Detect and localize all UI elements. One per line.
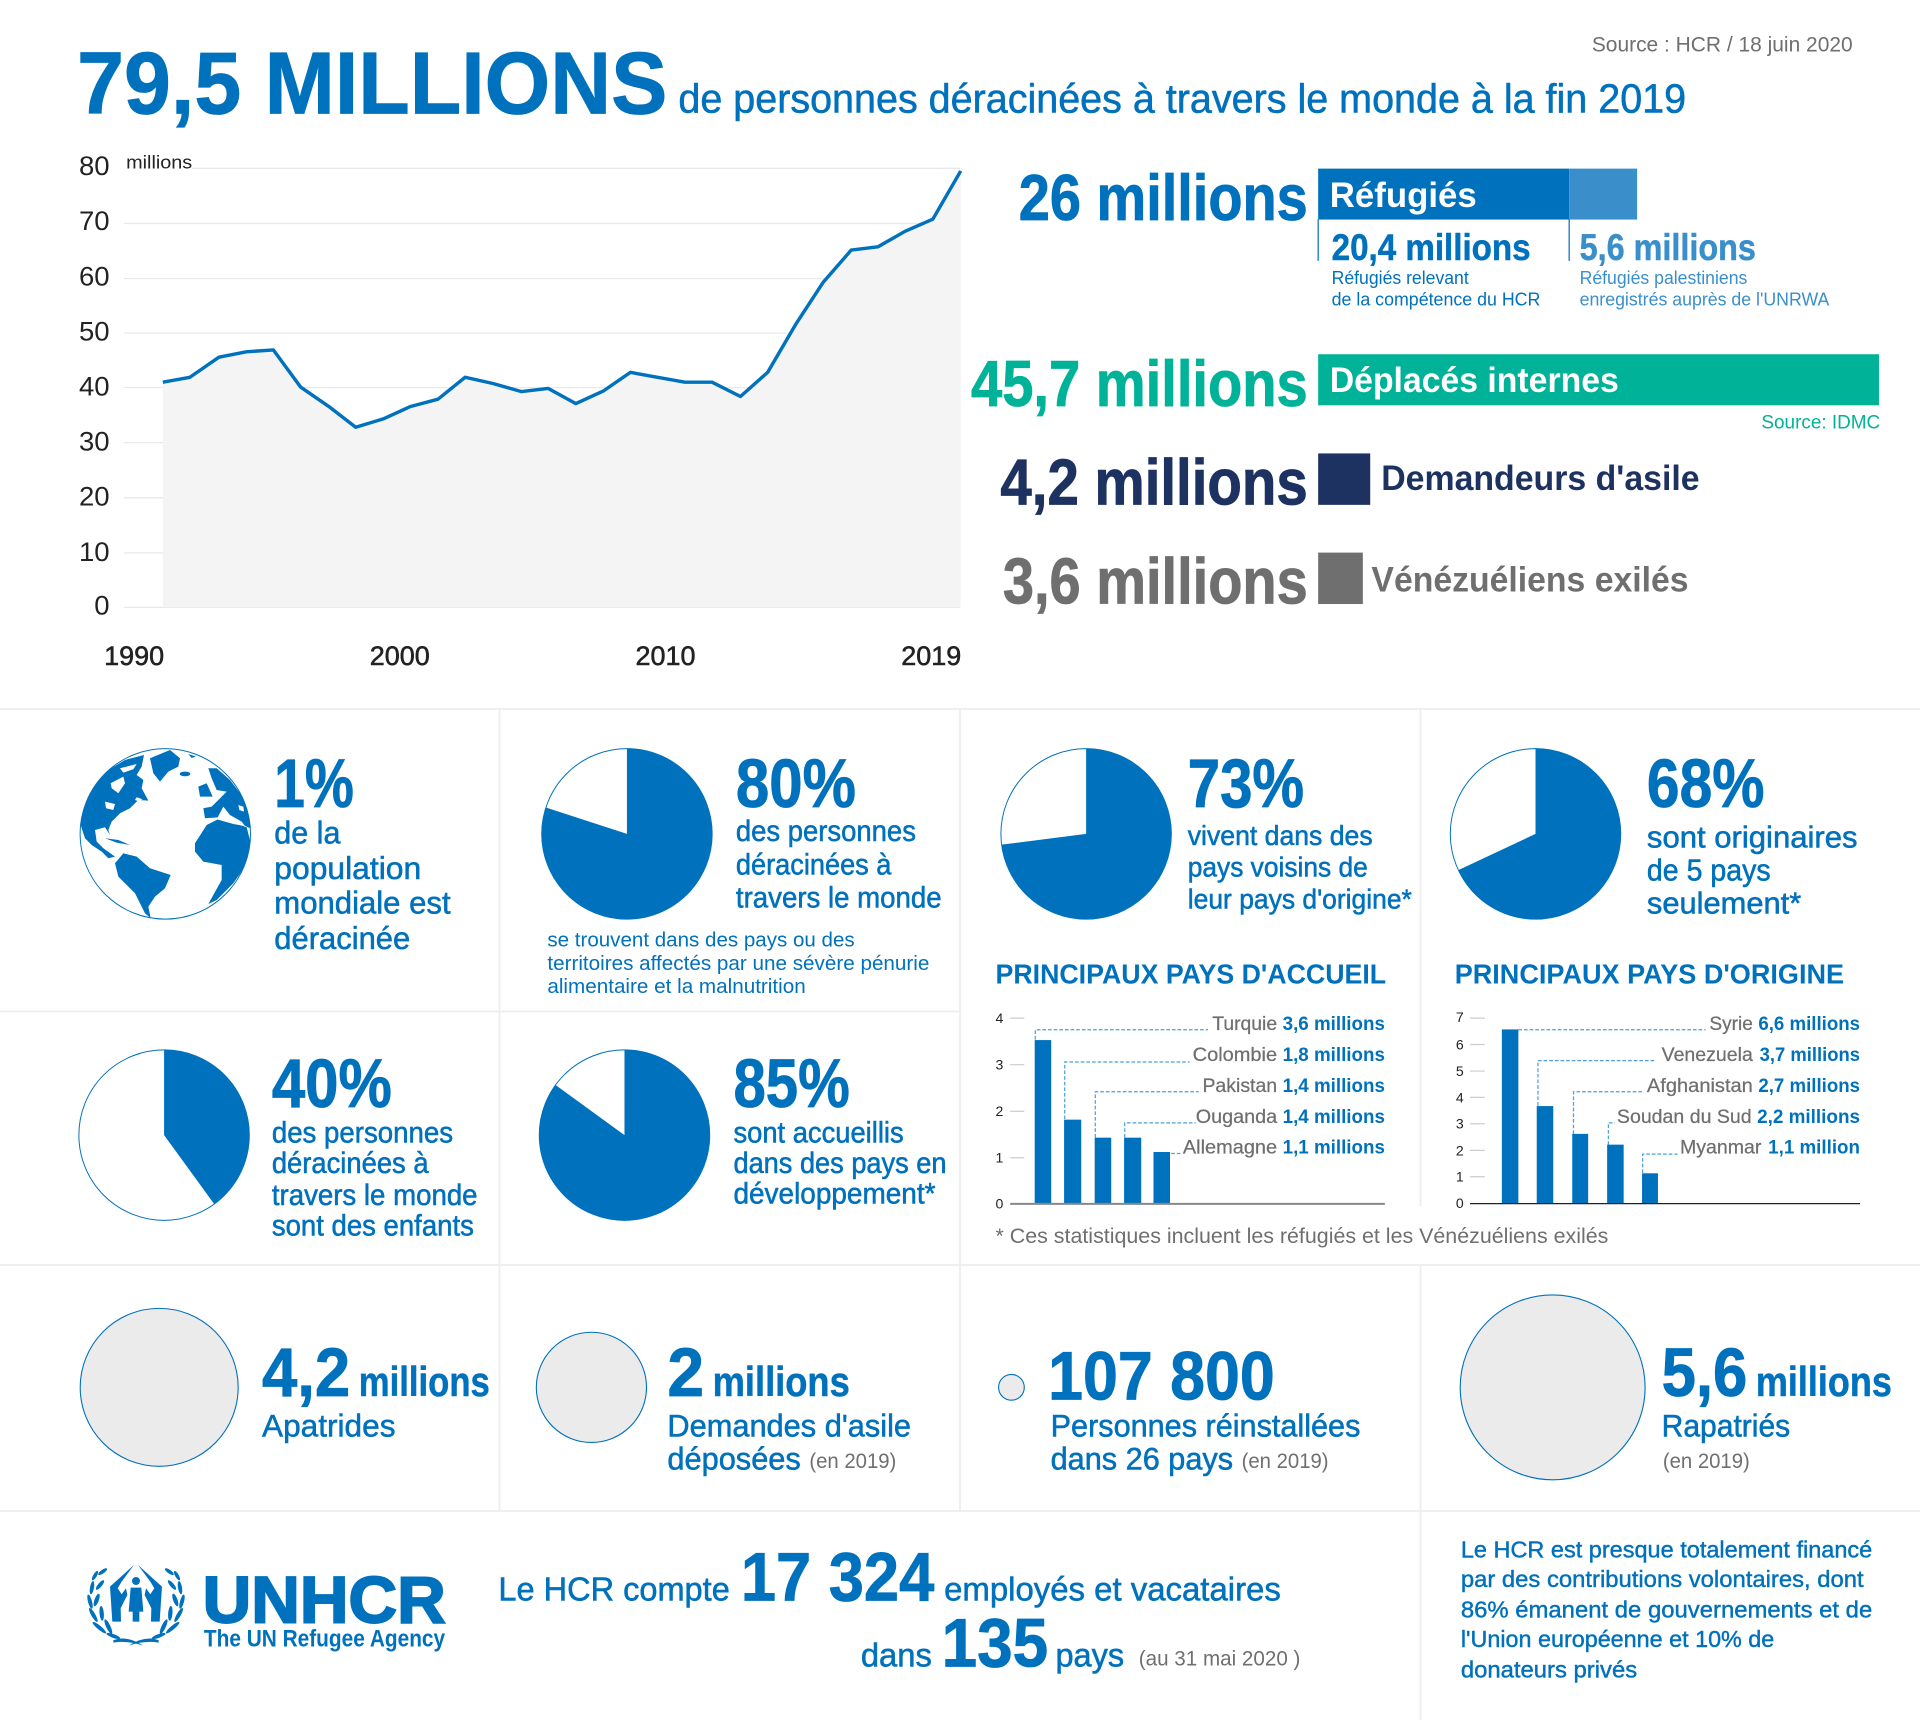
funding text: par des contributions volontaires, dont <box>1461 1566 1864 1592</box>
bar chart: principaux pays d'origine: 6 <box>1456 1036 1464 1052</box>
bar chart: principaux pays d'accueil: Ouganda <box>1196 1107 1278 1128</box>
panel: 80%: travers le monde <box>736 881 942 914</box>
staff text: dans <box>861 1638 932 1675</box>
bar chart: principaux pays d'origine: Soudan du Sud <box>1617 1107 1752 1128</box>
panel: déplacés internes <box>971 347 1880 434</box>
panel: 1% population <box>80 745 451 956</box>
panel: 80% <box>542 745 942 998</box>
panel: réfugiés: 5,6 millions <box>1580 227 1756 268</box>
panel: 40% <box>79 1045 478 1243</box>
panel: rapatriés: Rapatriés <box>1662 1407 1790 1443</box>
bar chart: principaux pays d'origine: 3 <box>1456 1116 1464 1132</box>
pie: 40% <box>79 1050 249 1220</box>
bar chart: principaux pays d'accueil: Turquie <box>1212 1014 1277 1035</box>
panel: 80%: se trouvent dans des pays ou des <box>547 930 855 952</box>
panel: 1% population: population <box>274 850 421 886</box>
line chart: displaced people 1990-2019: 40 <box>79 372 110 402</box>
panel: 68%: de 5 pays <box>1647 853 1771 887</box>
bar chart: principaux pays d'accueil: 0 <box>996 1196 1004 1212</box>
panel: rapatriés: millions <box>1756 1358 1892 1405</box>
bar chart: principaux pays d'accueil: 1,4 millions <box>1283 1076 1385 1097</box>
panel: 73% <box>1001 745 1412 919</box>
panel: apatrides: 4,2 <box>262 1334 350 1411</box>
panel: 1% population: mondiale est <box>274 884 451 920</box>
bar chart: principaux pays d'accueil: 1,1 millions <box>1283 1137 1385 1158</box>
panel: réfugiés: Réfugiés palestiniens <box>1580 267 1747 288</box>
panel: demandes d'asile <box>536 1332 911 1476</box>
staff text: (au 31 mai 2020 ) <box>1139 1647 1300 1670</box>
panel: demandeurs d'asile: 4,2 millions <box>1000 445 1308 518</box>
panel: rapatriés <box>1460 1295 1892 1480</box>
bar chart: principaux pays d'origine: 2 <box>1456 1142 1464 1158</box>
staff text: 17 324 <box>741 1538 934 1615</box>
bar chart: principaux pays d'accueil: 1,4 millions <box>1283 1107 1385 1128</box>
panel: 40%: déracinées à <box>272 1147 429 1180</box>
panel: 73%: 73% <box>1188 745 1304 822</box>
panel: 80%: déracinées à <box>736 848 892 881</box>
panel: 40%: sont des enfants <box>272 1210 474 1243</box>
bar chart: principaux pays d'accueil: 3,6 millions <box>1283 1014 1385 1035</box>
panel: 80%: territoires affectés par une sévère pénurie <box>547 953 929 975</box>
panel: personnes réinstallées: 107 800 <box>1048 1338 1275 1415</box>
staff text: 135 <box>942 1605 1048 1682</box>
panel: apatrides: millions <box>359 1358 490 1405</box>
panel: demandes d'asile: Demandes d'asile <box>667 1407 911 1443</box>
source note: Source : HCR / 18 juin 2020 <box>1592 33 1853 56</box>
panel: vénézuéliens exilés: Vénézuéliens exilés <box>1371 559 1689 599</box>
panel: 1% population: de la <box>274 815 341 851</box>
panel: réfugiés: 26 millions <box>1019 161 1308 234</box>
panel: personnes réinstallées: dans 26 pays <box>1051 1440 1233 1476</box>
logo: UNHCR: UNHCR <box>203 1563 446 1637</box>
line chart: displaced people 1990-2019: 20 <box>79 482 110 512</box>
bar chart: principaux pays d'origine: 6,6 millions <box>1758 1014 1860 1035</box>
panel: 68%: sont originaires <box>1647 820 1858 854</box>
line chart: displaced people 1990-2019: 60 <box>79 261 110 291</box>
panel: 85%: dans des pays en <box>733 1147 947 1180</box>
panel: réfugiés: Réfugiés <box>1330 175 1477 215</box>
panel: 1% population: 1% <box>274 745 354 822</box>
panel: rapatriés: 5,6 <box>1662 1334 1747 1411</box>
panel: personnes réinstallées: (en 2019) <box>1242 1450 1329 1473</box>
panel: réfugiés <box>1019 161 1830 309</box>
panel: apatrides <box>80 1308 490 1466</box>
panel: personnes réinstallées <box>999 1338 1360 1476</box>
panel: demandes d'asile: millions <box>713 1358 850 1405</box>
panel: rapatriés: (en 2019) <box>1663 1450 1750 1473</box>
panel: 40%: travers le monde <box>272 1179 478 1212</box>
footnote: * Ces statistiques incluent les réfugiés et les Vénézuéliens exilés <box>996 1224 1608 1248</box>
panel: vénézuéliens exilés: 3,6 millions <box>1003 545 1308 618</box>
line chart: displaced people 1990-2019: 80 <box>79 151 110 181</box>
staff text: pays <box>1056 1638 1124 1675</box>
panel: vénézuéliens exilés <box>1003 545 1689 618</box>
panel: déplacés internes: 45,7 millions <box>971 347 1308 420</box>
funding text <box>1461 1537 1872 1683</box>
line chart: displaced people 1990-2019: 10 <box>79 537 110 567</box>
pie: 85% <box>539 1050 710 1220</box>
bar chart: principaux pays d'accueil: PRINCIPAUX PAYS D'ACCUEIL <box>996 958 1386 989</box>
bar chart: principaux pays d'origine: 1 <box>1456 1169 1464 1185</box>
title: 79,5 MILLIONS <box>77 33 667 132</box>
bar chart: principaux pays d'origine: PRINCIPAUX PAYS D'ORIGINE <box>1455 958 1844 989</box>
funding text: Le HCR est presque totalement financé <box>1461 1537 1872 1563</box>
panel: demandeurs d'asile <box>1000 445 1700 518</box>
panel: 68%: 68% <box>1647 745 1764 822</box>
bar chart: principaux pays d'origine: Syrie <box>1709 1014 1753 1035</box>
panel: déplacés internes: Source: IDMC <box>1761 412 1880 434</box>
line chart: displaced people 1990-2019 <box>79 151 961 671</box>
panel: 80%: alimentaire et la malnutrition <box>547 976 806 998</box>
panel: apatrides: Apatrides <box>262 1407 396 1443</box>
bar chart: principaux pays d'origine: 5 <box>1456 1063 1464 1079</box>
bar chart: principaux pays d'accueil: 1 <box>996 1150 1004 1166</box>
bar chart: principaux pays d'accueil: Allemagne <box>1183 1137 1277 1158</box>
panel: personnes réinstallées: Personnes réinstallées <box>1051 1407 1360 1443</box>
line chart: displaced people 1990-2019: 1990 <box>104 641 164 671</box>
title <box>77 33 1686 132</box>
bar chart: principaux pays d'accueil: Colombie <box>1193 1045 1277 1066</box>
panel: 73%: leur pays d'origine* <box>1188 884 1412 915</box>
panel: 85%: 85% <box>733 1045 850 1122</box>
panel: 68% <box>1450 745 1858 920</box>
bar chart: principaux pays d'accueil: 4 <box>996 1010 1004 1026</box>
icon: globe <box>80 749 252 919</box>
panel: 40%: 40% <box>272 1045 392 1122</box>
panel: demandeurs d'asile: Demandeurs d'asile <box>1381 458 1700 498</box>
line chart: displaced people 1990-2019: millions <box>126 151 192 172</box>
bar chart: principaux pays d'origine: 0 <box>1456 1195 1464 1211</box>
line chart: displaced people 1990-2019: 30 <box>79 427 110 457</box>
bar chart: principaux pays d'origine: Afghanistan <box>1647 1076 1753 1097</box>
line chart: displaced people 1990-2019: 2000 <box>370 641 430 671</box>
line chart: displaced people 1990-2019: 2010 <box>636 641 696 671</box>
bar chart: principaux pays d'origine: 3,7 millions <box>1760 1045 1860 1066</box>
bar chart: principaux pays d'origine: 1,1 million <box>1768 1137 1860 1158</box>
pie: 73% <box>1001 749 1171 919</box>
panel: 1% population: déracinée <box>274 920 410 956</box>
panel: réfugiés: enregistrés auprès de l'UNRWA <box>1580 288 1830 309</box>
logo: UNHCR: The UN Refugee Agency <box>204 1625 446 1652</box>
bar chart: principaux pays d'accueil: Pakistan <box>1202 1076 1277 1097</box>
line chart: displaced people 1990-2019: 2019 <box>901 641 961 671</box>
bar chart: principaux pays d'accueil: 3 <box>996 1057 1004 1073</box>
bar chart: principaux pays d'origine: 7 <box>1456 1009 1464 1025</box>
panel: réfugiés: de la compétence du HCR <box>1332 288 1540 309</box>
pie: 80% <box>542 749 712 919</box>
funding text: l'Union européenne et 10% de <box>1461 1626 1774 1652</box>
bar chart: principaux pays d'origine <box>1455 958 1860 1211</box>
staff text: Le HCR compte <box>498 1571 730 1608</box>
bar chart: principaux pays d'accueil: 2 <box>996 1103 1004 1119</box>
funding text: 86% émanent de gouvernements et de <box>1461 1597 1872 1623</box>
line chart: displaced people 1990-2019: 0 <box>94 591 110 621</box>
line chart: displaced people 1990-2019: 70 <box>79 206 110 236</box>
bar chart: principaux pays d'accueil: 1,8 millions <box>1283 1045 1385 1066</box>
panel: 73%: pays voisins de <box>1188 852 1368 883</box>
panel: 68%: seulement* <box>1647 886 1801 920</box>
panel: 80%: 80% <box>736 745 856 822</box>
bar chart: principaux pays d'origine: 2,2 millions <box>1757 1107 1860 1128</box>
panel: demandes d'asile: 2 <box>667 1334 704 1411</box>
panel: réfugiés: Réfugiés relevant <box>1332 267 1469 288</box>
funding text: donateurs privés <box>1461 1657 1637 1683</box>
staff text <box>498 1538 1300 1682</box>
panel: 73%: vivent dans des <box>1188 820 1373 851</box>
logo: UNHCR <box>86 1563 446 1652</box>
bar chart: principaux pays d'origine: 4 <box>1456 1089 1464 1105</box>
panel: demandes d'asile: déposées <box>667 1440 801 1476</box>
bar chart: principaux pays d'accueil <box>996 958 1386 1212</box>
panel: demandes d'asile: (en 2019) <box>809 1450 896 1473</box>
bar chart: principaux pays d'origine: Venezuela <box>1662 1045 1753 1066</box>
bar chart: principaux pays d'origine: 2,7 millions <box>1758 1076 1860 1097</box>
panel: 40%: des personnes <box>272 1116 453 1149</box>
panel: 85%: sont accueillis <box>733 1116 904 1149</box>
panel: réfugiés: 20,4 millions <box>1332 227 1531 268</box>
pie: 68% <box>1450 749 1621 919</box>
icon: UNHCR emblem <box>86 1565 186 1646</box>
line chart: displaced people 1990-2019: 50 <box>79 316 110 346</box>
panel: 80%: des personnes <box>736 815 916 848</box>
panel: 85%: développement* <box>733 1178 936 1211</box>
title: de personnes déracinées à travers le monde à la fin 2019 <box>678 76 1686 122</box>
staff text: employés et vacataires <box>944 1571 1281 1608</box>
bar chart: principaux pays d'origine: Myanmar <box>1680 1137 1761 1158</box>
panel: 85% <box>539 1045 947 1220</box>
panel: déplacés internes: Déplacés internes <box>1330 360 1619 400</box>
